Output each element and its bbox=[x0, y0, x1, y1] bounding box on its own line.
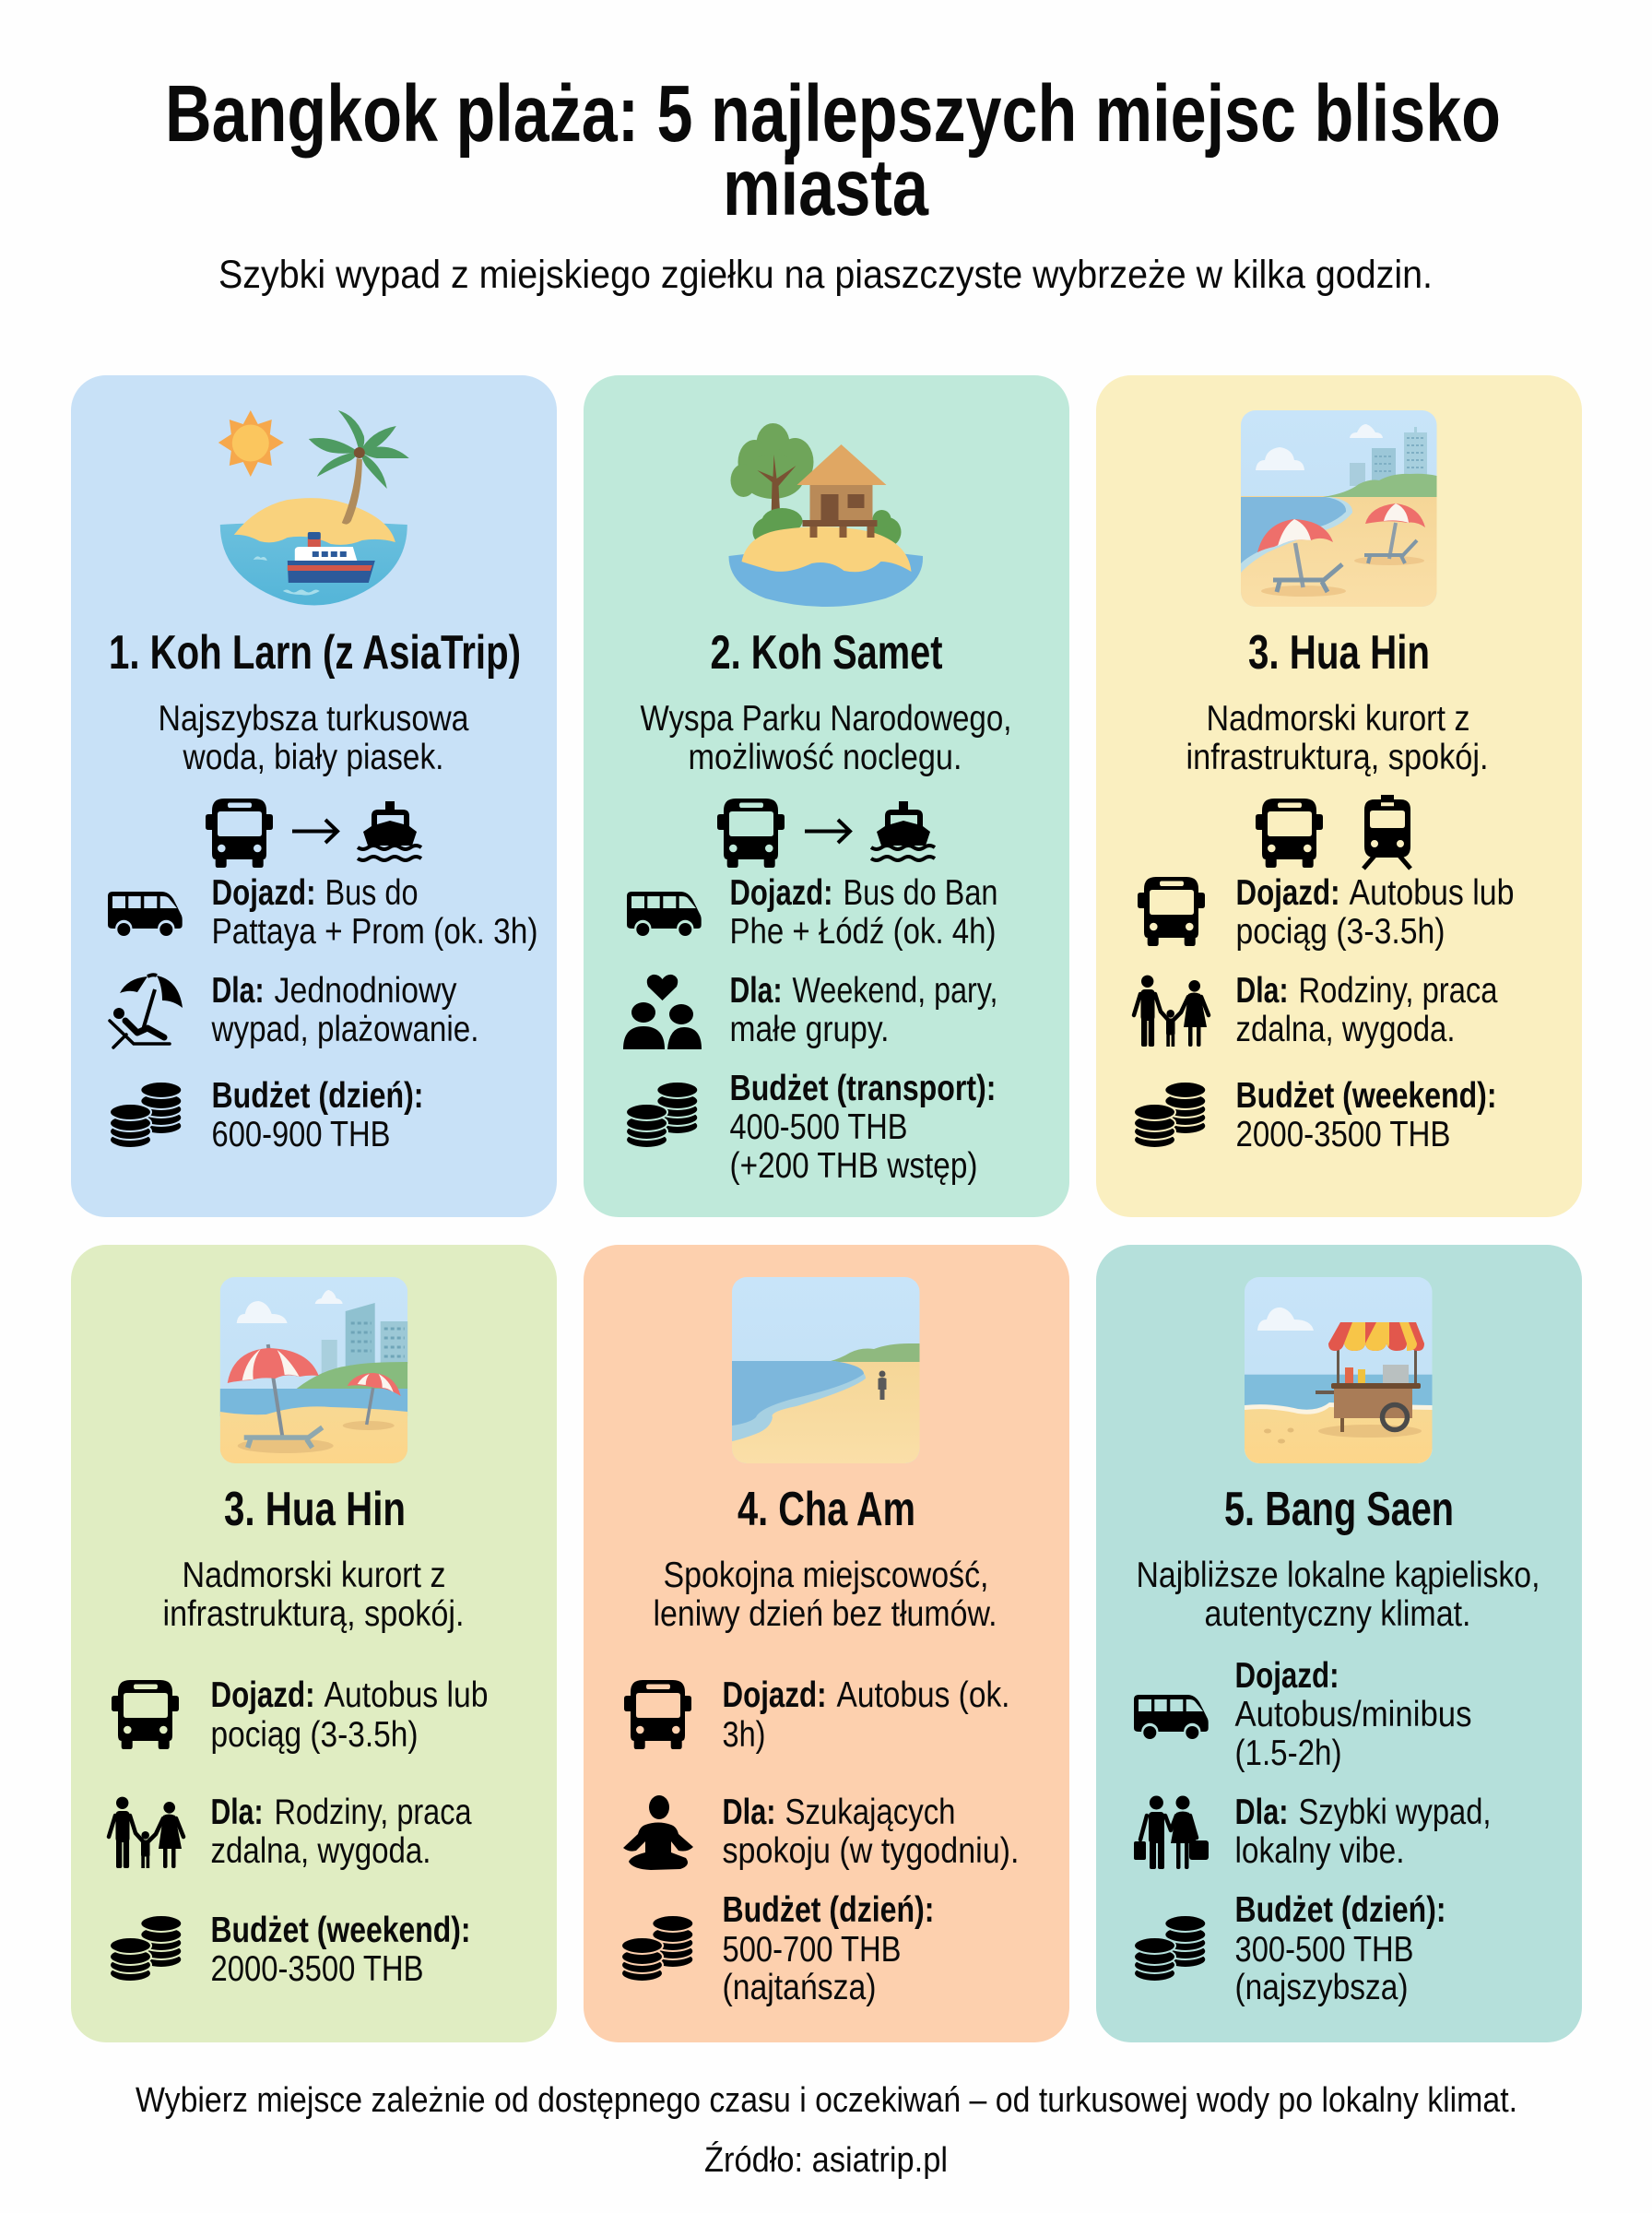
illustration: resort beach with two umbrellas bbox=[1241, 410, 1436, 607]
icon: couple with heart bbox=[623, 975, 702, 1049]
row: access: Autobus (ok. bbox=[837, 1675, 1010, 1715]
icon: coins bbox=[626, 1082, 698, 1148]
description: Nadmorski kurort z bbox=[1206, 699, 1469, 739]
illustration: island with hut and tree bbox=[728, 423, 923, 607]
row: budget: (najtańsza) bbox=[723, 1968, 876, 2007]
place title: 3. Hua Hin bbox=[224, 1483, 406, 1536]
panel: 3. Hua Hin (green) bbox=[71, 1245, 557, 2042]
footer note: Wybierz miejsce zależnie od dostępnego czasu i oczekiwań – od turkusowej wody po lokalny klimat. bbox=[136, 2081, 1517, 2120]
icon: bus bbox=[112, 1680, 179, 1749]
icon: minibus bbox=[108, 892, 183, 936]
row: audience: spokoju (w tygodniu). bbox=[723, 1831, 1020, 1871]
place title: 4. Cha Am bbox=[738, 1483, 915, 1536]
icon: sunbather under umbrella bbox=[110, 975, 183, 1047]
description: Najszybsza turkusowa bbox=[159, 699, 469, 739]
description bbox=[162, 1556, 465, 1634]
illustration: island with palm, sun and ferry bbox=[218, 410, 409, 605]
row: audience: Dla: bbox=[212, 971, 264, 1011]
illustration: quiet beach with lone walker bbox=[732, 1277, 920, 1463]
row: audience: małe grupy. bbox=[730, 1010, 889, 1049]
row: access: 3h) bbox=[723, 1715, 765, 1755]
row: access: (1.5-2h) bbox=[1235, 1734, 1342, 1773]
description: Spokojna miejscowość, bbox=[664, 1556, 988, 1595]
description: możliwość noclegu. bbox=[688, 738, 962, 777]
row: access: Autobus lub bbox=[324, 1675, 489, 1715]
panel: 3. Hua Hin (yellow) bbox=[1096, 375, 1582, 1217]
row: budget: 400-500 THB bbox=[730, 1107, 907, 1147]
row: access bbox=[730, 873, 997, 952]
row: budget: 500-700 THB bbox=[723, 1930, 902, 1970]
row: access: Bus do Ban bbox=[843, 873, 997, 913]
place title: 1. Koh Larn (z AsiaTrip) bbox=[109, 626, 521, 680]
row: access: Bus do bbox=[324, 873, 419, 913]
row: budget bbox=[723, 1890, 935, 2007]
row: access: Phe + Łódź (ok. 4h) bbox=[730, 912, 996, 952]
description bbox=[653, 1556, 997, 1634]
row: access: Dojazd: bbox=[723, 1675, 826, 1715]
panel: 2. Koh Samet bbox=[584, 375, 1069, 1217]
icon: coins bbox=[110, 1082, 182, 1148]
row: audience: Jednodniowy bbox=[275, 971, 457, 1011]
row: access bbox=[723, 1675, 1010, 1755]
row: access bbox=[210, 1675, 489, 1755]
row: budget bbox=[210, 1911, 470, 1989]
description bbox=[640, 699, 1012, 777]
row: audience: lokalny vibe. bbox=[1235, 1831, 1405, 1871]
description: infrastrukturą, spokój. bbox=[1186, 738, 1488, 777]
row: budget: (+200 THB wstęp) bbox=[730, 1146, 977, 1186]
row: audience: Weekend, pary, bbox=[793, 971, 997, 1011]
row: budget: Budżet (dzień): bbox=[723, 1890, 935, 1930]
row: audience: Rodziny, praca bbox=[275, 1793, 472, 1832]
description: Wyspa Parku Narodowego, bbox=[640, 699, 1012, 739]
row: budget bbox=[1235, 1076, 1497, 1154]
icon: coins bbox=[1134, 1082, 1206, 1148]
row: access: Autobus lub bbox=[1350, 873, 1514, 913]
row: audience: Rodziny, praca bbox=[1298, 971, 1498, 1011]
icon: minibus bbox=[627, 892, 702, 936]
row: access: Dojazd: bbox=[210, 1675, 315, 1715]
description bbox=[159, 699, 469, 777]
row: audience bbox=[211, 971, 478, 1049]
row: audience bbox=[1235, 1793, 1492, 1871]
row: access: Dojazd: bbox=[1235, 873, 1340, 913]
place title: 3. Hua Hin bbox=[1248, 626, 1430, 680]
row: access: pociąg (3-3.5h) bbox=[1235, 912, 1446, 952]
panel: 5. Bang Saen bbox=[1096, 1245, 1582, 2042]
icon: bus bbox=[624, 1680, 691, 1749]
row: budget bbox=[730, 1069, 996, 1186]
row: budget: 2000-3500 THB bbox=[210, 1949, 424, 1989]
description bbox=[1186, 699, 1488, 777]
row: audience: Dla: bbox=[723, 1793, 776, 1832]
row: budget: 600-900 THB bbox=[212, 1115, 391, 1154]
row: budget: 2000-3500 THB bbox=[1235, 1115, 1451, 1154]
description: Najbliższe lokalne kąpielisko, bbox=[1136, 1556, 1540, 1595]
row: access: Pattaya + Prom (ok. 3h) bbox=[212, 912, 538, 952]
row: access: Dojazd: bbox=[730, 873, 833, 913]
row: access: pociąg (3-3.5h) bbox=[210, 1715, 419, 1755]
title: miasta bbox=[723, 143, 928, 232]
panel: 4. Cha Am bbox=[584, 1245, 1069, 2042]
row: budget: (najszybsza) bbox=[1235, 1968, 1409, 2007]
row: budget: Budżet (transport): bbox=[730, 1069, 996, 1108]
transport icons: bus to ferry bbox=[717, 799, 935, 868]
icon: family bbox=[1134, 976, 1209, 1047]
illustration: beach with city skyline bbox=[220, 1277, 408, 1463]
transport icons: bus and train bbox=[1256, 795, 1410, 869]
row: audience: Dla: bbox=[1235, 971, 1289, 1011]
icon: coins bbox=[110, 1915, 182, 1982]
row: audience: Dla: bbox=[730, 971, 782, 1011]
row: audience bbox=[1235, 971, 1498, 1049]
row: audience bbox=[723, 1793, 1020, 1871]
icon: coins bbox=[1134, 1915, 1206, 1982]
subtitle: Szybki wypad z miejskiego zgiełku na piaszczyste wybrzeże w kilka godzin. bbox=[218, 253, 1433, 297]
row: audience: Dla: bbox=[210, 1793, 264, 1832]
row: budget: Budżet (weekend): bbox=[210, 1911, 470, 1950]
row: audience bbox=[210, 1793, 472, 1871]
description bbox=[1136, 1556, 1540, 1634]
description: woda, biały piasek. bbox=[183, 738, 444, 777]
place title: 2. Koh Samet bbox=[710, 626, 942, 680]
icon: meditating person bbox=[623, 1795, 693, 1870]
row: access bbox=[1235, 873, 1514, 952]
row: budget: Budżet (dzień): bbox=[212, 1076, 424, 1116]
source: Źródło: asiatrip.pl bbox=[704, 2140, 948, 2180]
row: access bbox=[1235, 1656, 1471, 1773]
row: audience: zdalna, wygoda. bbox=[1235, 1010, 1455, 1049]
row: access: Autobus/minibus bbox=[1235, 1695, 1471, 1734]
panel: 1. Koh Larn bbox=[71, 375, 557, 1217]
icon: minibus bbox=[1134, 1695, 1209, 1739]
row: audience: Dla: bbox=[1235, 1793, 1289, 1832]
description: Nadmorski kurort z bbox=[183, 1556, 446, 1595]
row: budget bbox=[212, 1076, 424, 1154]
row: audience bbox=[730, 971, 997, 1049]
icon: bus bbox=[1138, 877, 1205, 946]
description: infrastrukturą, spokój. bbox=[162, 1594, 465, 1634]
row: access: Dojazd: bbox=[212, 873, 315, 913]
row: access bbox=[212, 873, 538, 952]
row: audience: Szybki wypad, bbox=[1298, 1793, 1492, 1832]
transport icons: bus to ferry bbox=[206, 799, 421, 868]
place title: 5. Bang Saen bbox=[1224, 1483, 1454, 1536]
icon: couple with bags bbox=[1134, 1796, 1209, 1869]
icon: coins bbox=[621, 1915, 693, 1982]
icon: family bbox=[109, 1797, 183, 1868]
title bbox=[165, 69, 1501, 232]
description: autentyczny klimat. bbox=[1204, 1594, 1471, 1634]
illustration: food cart on the beach bbox=[1245, 1277, 1433, 1463]
description: leniwy dzień bez tłumów. bbox=[653, 1594, 997, 1634]
row: audience: zdalna, wygoda. bbox=[210, 1831, 431, 1871]
row: budget: 300-500 THB bbox=[1235, 1930, 1414, 1970]
row: audience: Szukających bbox=[785, 1793, 955, 1832]
row: access: Dojazd: bbox=[1235, 1656, 1339, 1696]
row: budget: Budżet (weekend): bbox=[1235, 1076, 1497, 1116]
row: budget: Budżet (dzień): bbox=[1235, 1890, 1446, 1930]
row: audience: wypad, plażowanie. bbox=[211, 1010, 478, 1049]
row: budget bbox=[1235, 1890, 1446, 2007]
